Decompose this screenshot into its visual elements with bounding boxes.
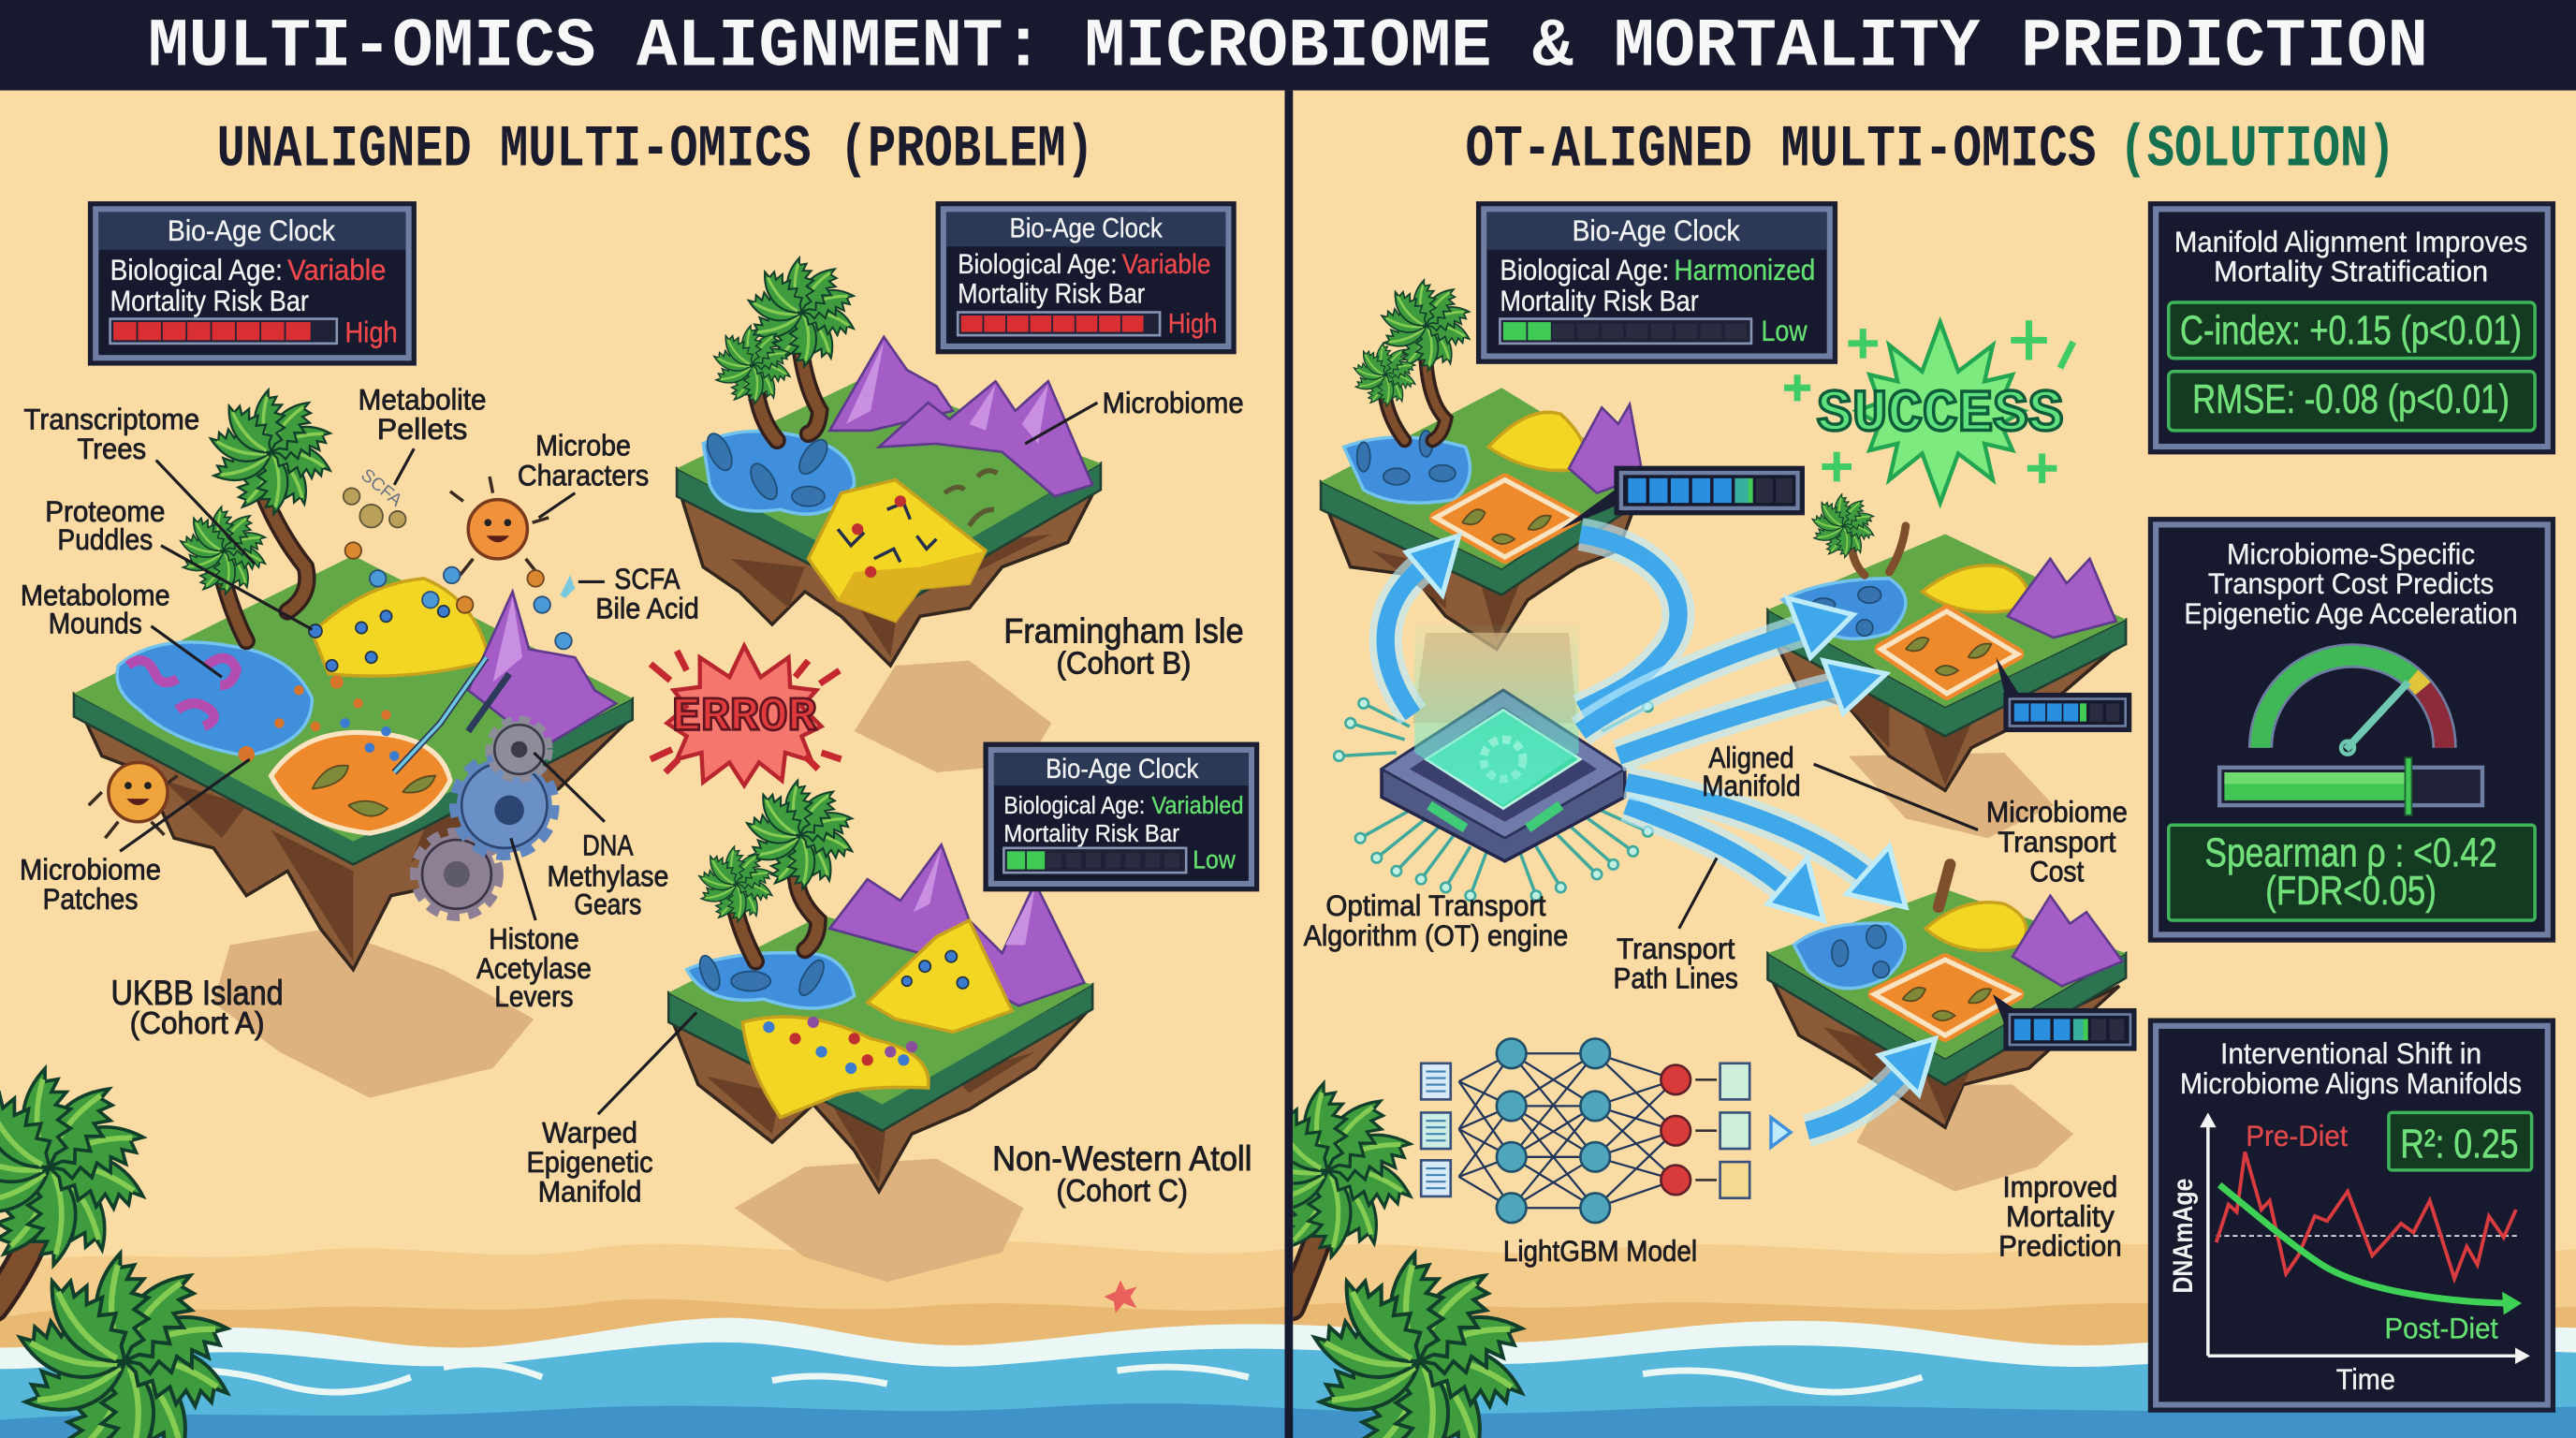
labels: UKBB island: DNA xyxy=(582,828,634,861)
labels: UKBB island: (Cohort A) xyxy=(130,1006,265,1041)
palm: right panel leaning xyxy=(1293,1079,1414,1322)
clock panel: cohort B: Mortality Risk Bar xyxy=(958,279,1145,310)
metabolite pellets: SCFA xyxy=(357,465,405,511)
clock panel: harmonized: Harmonized xyxy=(1674,253,1815,286)
slider xyxy=(2219,757,2482,815)
clock panel: cohort C: Variabled xyxy=(1151,791,1244,819)
labels: UKBB island: Levers xyxy=(494,979,574,1013)
island: aligned bottom xyxy=(1767,864,2126,1192)
palm: right panel front xyxy=(1309,1254,1530,1438)
starfish xyxy=(1104,1280,1137,1313)
labels: UKBB island: UKBB Island xyxy=(110,974,284,1012)
labels: Non-Western Atoll: (Cohort C) xyxy=(1057,1174,1188,1209)
progress bar: bottom island xyxy=(1993,994,2134,1049)
labels: UKBB island: Metabolome xyxy=(21,578,170,611)
icon: palms on Non-Western Atoll xyxy=(697,781,856,961)
clock panel: cohort A: Variable xyxy=(287,253,386,286)
clock panel: cohort C: Low xyxy=(1193,845,1236,874)
labels: aligned panel: Microbiome xyxy=(1986,795,2128,829)
labels: Non-Western Atoll xyxy=(527,1012,1251,1209)
clock panel: cohort C: Biological Age: xyxy=(1003,791,1145,819)
labels: UKBB island: Characters xyxy=(518,458,649,492)
stats panel: transport cost gauge: Epigenetic Age Acceleration xyxy=(2184,596,2518,630)
title bar: MULTI-OMICS ALIGNMENT: MICROBIOME & MORTALITY PREDICTION xyxy=(148,8,2428,86)
labels: UKBB island: SCFA xyxy=(614,562,681,595)
icon: palms on Framingham Isle xyxy=(711,257,857,440)
beach and ocean bands xyxy=(0,1241,2576,1438)
clock panel: harmonized: Biological Age: xyxy=(1500,253,1669,286)
labels: aligned panel xyxy=(1304,741,2128,1268)
labels: Framingham Isle: (Cohort B) xyxy=(1057,647,1191,682)
icon: transcriptome palm trees xyxy=(178,390,335,641)
metabolite pellets xyxy=(344,465,575,649)
labels: UKBB island xyxy=(20,383,699,1041)
labels: aligned panel: Transport xyxy=(1617,932,1735,965)
labels: Framingham Isle: Framingham Isle xyxy=(1003,612,1244,651)
labels: aligned panel: Aligned xyxy=(1708,741,1794,774)
stats panel: transport cost gauge: (FDR<0.05) xyxy=(2265,868,2437,914)
clock panel: harmonized: Low xyxy=(1761,314,1808,347)
clock panel: cohort A: Bio-Age Clock xyxy=(168,213,335,247)
icon: gears xyxy=(417,722,552,914)
stats panel: transport cost gauge: Spearman ρ : <0.42 xyxy=(2204,830,2497,876)
labels: aligned panel: Manifold xyxy=(1702,769,1801,802)
error burst xyxy=(651,646,842,785)
LightGBM neural network xyxy=(1421,1038,1791,1223)
clock panel: cohort B: Bio-Age Clock xyxy=(1010,213,1163,244)
stats panel: transport cost gauge: Transport Cost Predicts xyxy=(2208,566,2494,600)
chart panel: interventional shift: DNAmAge xyxy=(2168,1179,2199,1294)
labels: aligned panel: Algorithm (OT) engine xyxy=(1304,918,1568,952)
clock panel: cohort B: High xyxy=(1168,308,1218,339)
labels: Non-Western Atoll: Manifold xyxy=(538,1175,641,1209)
chart panel: interventional shift: Post-Diet xyxy=(2385,1311,2498,1344)
progress bar: middle island xyxy=(1996,657,2130,729)
stats panel: mortality stratification: Manifold Alignment Improves xyxy=(2174,225,2527,258)
chart panel: interventional shift: Microbiome Aligns Manifolds xyxy=(2180,1066,2522,1100)
labels: UKBB island: Acetylase xyxy=(476,951,592,985)
labels: UKBB island: Histone xyxy=(489,921,579,955)
optimal transport engine chip xyxy=(1334,624,1667,901)
labels: aligned panel: Path Lines xyxy=(1614,961,1738,994)
labels: UKBB island: Metabolite xyxy=(359,383,487,417)
pre-diet line xyxy=(2217,1152,2516,1279)
labels: UKBB island: Proteome xyxy=(45,494,165,528)
labels: UKBB island: Trees xyxy=(77,432,146,465)
clock panel: cohort C: Bio-Age Clock xyxy=(1046,754,1198,785)
labels: Non-Western Atoll: Warped xyxy=(542,1115,637,1149)
labels: aligned panel: Prediction xyxy=(1998,1229,2122,1263)
heading: aligned solution: (SOLUTION) xyxy=(2119,116,2395,183)
heading: unaligned problem: UNALIGNED MULTI-OMICS (PROBLEM) xyxy=(217,116,1094,183)
success burst: SUCCESS xyxy=(1817,380,2063,448)
labels: Framingham Isle: Microbiome xyxy=(1103,386,1244,419)
labels: UKBB island: Patches xyxy=(43,882,138,916)
progress bar: top island xyxy=(1560,468,1802,529)
island: aligned middle xyxy=(1767,494,2126,838)
labels: UKBB island: Puddles xyxy=(57,522,153,556)
icon: microbe character top xyxy=(450,477,549,575)
stats panel: transport cost gauge: Microbiome-Specific xyxy=(2227,537,2475,571)
labels: UKBB island: Pellets xyxy=(377,412,467,446)
labels: aligned panel: Transport xyxy=(1998,825,2116,858)
post-diet line xyxy=(2219,1185,2506,1303)
clock panel: cohort A: Mortality Risk Bar xyxy=(110,284,309,317)
labels: UKBB island: Methylase xyxy=(547,859,668,893)
palm: lower-left leaning xyxy=(0,1068,151,1307)
labels: aligned panel: Mortality xyxy=(2006,1199,2115,1233)
labels: Non-Western Atoll: Epigenetic xyxy=(527,1145,653,1179)
island: Framingham cohort B xyxy=(677,337,1101,772)
palm: lower-left front xyxy=(14,1254,236,1438)
clock panel: cohort A: Biological Age: xyxy=(110,253,283,286)
stats panel: mortality stratification: Mortality Stratification xyxy=(2214,255,2488,288)
clock panel: cohort A xyxy=(91,204,414,363)
labels: aligned panel: Improved xyxy=(2002,1169,2117,1203)
clock panel: cohort C xyxy=(986,744,1257,889)
labels: aligned panel: Optimal Transport xyxy=(1325,888,1546,922)
island: aligned top xyxy=(1321,388,1643,649)
clock panel: harmonized: Mortality Risk Bar xyxy=(1500,284,1699,317)
labels: Framingham Isle xyxy=(1003,386,1244,682)
labels: UKBB island: Microbiome xyxy=(20,853,161,887)
island: UKBB cohort A xyxy=(74,555,633,1098)
clock panel: cohort B: Biological Age: xyxy=(958,249,1117,280)
error burst: ERROR xyxy=(672,692,817,745)
labels: UKBB island: Bile Acid xyxy=(595,592,699,625)
success burst xyxy=(1784,320,2073,503)
icon: microbe character bottom xyxy=(89,763,178,838)
labels: UKBB island: Transcriptome xyxy=(23,403,199,436)
labels: UKBB island: Gears xyxy=(574,887,641,920)
island: Non-Western cohort C xyxy=(668,844,1092,1282)
clock panel: cohort A: High xyxy=(345,315,398,349)
icon: palms on aligned top island xyxy=(1352,280,1472,440)
chart panel: interventional shift: R²: 0.25 xyxy=(2400,1121,2519,1167)
labels: UKBB island: Mounds xyxy=(49,606,142,639)
clock panel: harmonized xyxy=(1479,204,1835,361)
chart panel: interventional shift xyxy=(2150,1020,2553,1410)
stats panel: mortality stratification xyxy=(2150,204,2553,452)
clock panel: cohort B xyxy=(938,204,1234,352)
clock panel: cohort B: Variable xyxy=(1122,249,1211,280)
labels: aligned panel: LightGBM Model xyxy=(1503,1234,1697,1268)
heading: aligned solution: OT-ALIGNED MULTI-OMICS xyxy=(1466,116,2097,183)
chart panel: interventional shift: Pre-Diet xyxy=(2246,1119,2348,1152)
axes xyxy=(2208,1121,2522,1356)
clock panel: harmonized: Bio-Age Clock xyxy=(1573,213,1740,247)
gauge xyxy=(2261,655,2445,755)
clock panel: cohort C: Mortality Risk Bar xyxy=(1003,819,1179,847)
centre divider xyxy=(1284,91,1293,1438)
labels: aligned panel: Cost xyxy=(2029,854,2085,888)
chart panel: interventional shift: Time xyxy=(2336,1362,2395,1396)
labels: UKBB island: Microbe xyxy=(535,429,631,462)
labels: Non-Western Atoll: Non-Western Atoll xyxy=(992,1139,1251,1178)
transport arrows xyxy=(1385,535,1936,1131)
chart panel: interventional shift: Interventional Shift in xyxy=(2220,1036,2481,1070)
stats panel: transport cost gauge xyxy=(2150,520,2553,940)
